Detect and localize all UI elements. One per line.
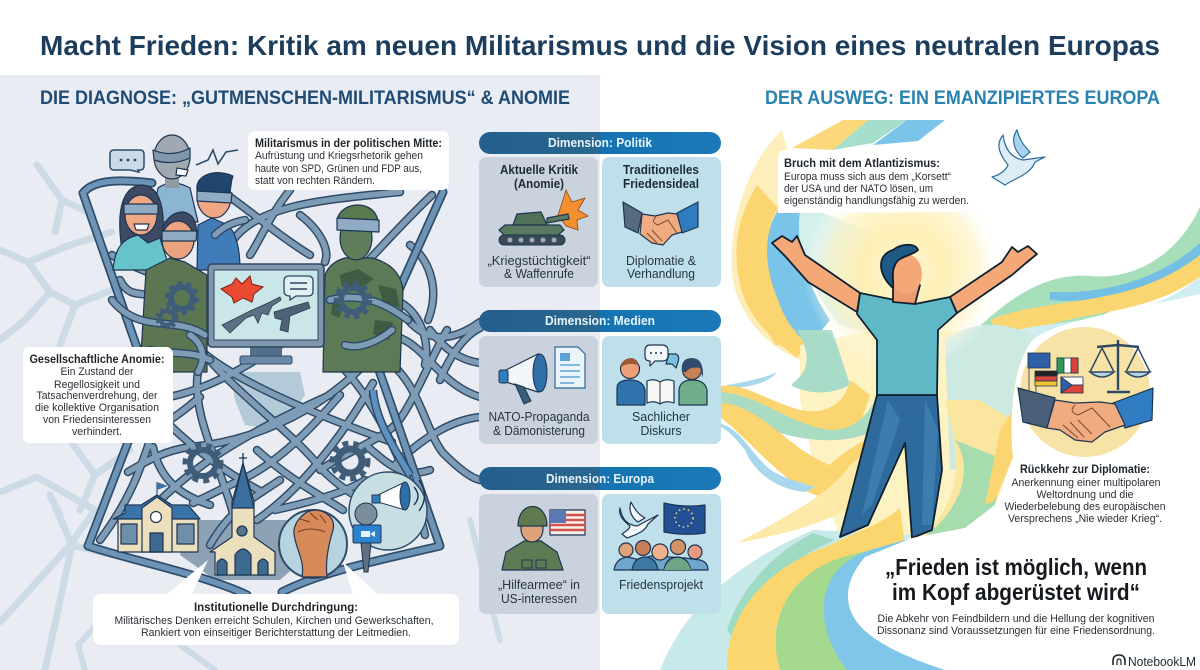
- callout: Rückkehr zur Diplomatie: Anerkennung einer multipolaren: [1012, 477, 1160, 489]
- callout: Bruch mit dem Atlantizismus: [778, 150, 978, 213]
- explosion: [221, 276, 263, 303]
- icon: flags: [1028, 353, 1083, 393]
- callout: Rückkehr zur Diplomatie: Wiederbelebung des europäischen: [1004, 501, 1166, 513]
- sun glow behind figure: [803, 170, 1003, 370]
- callout pointers: [167, 560, 377, 594]
- card: traditional ideal: Verhandlung: [627, 267, 695, 281]
- person: man in blue: [197, 173, 240, 270]
- shaded ground behind buildings: [180, 520, 320, 580]
- blindfolded crowd: [113, 135, 403, 372]
- heading: Der Ausweg: DER AUSWEG: EIN EMANZIPIERTES EUROPA: [765, 88, 1160, 109]
- right wave: [960, 207, 1200, 350]
- panel: Dimension Medien: [479, 310, 721, 444]
- monitor with weapons: [208, 264, 324, 364]
- figure with open arms: [772, 236, 1037, 538]
- callout: Militarismus in der politischen Mitte: Aufrüstung und Kriegsrhetorik gehen: [255, 150, 423, 162]
- callout: Institutionelle Durchdringung: [93, 594, 459, 645]
- neck and head: [893, 280, 920, 304]
- icon: US flag: [550, 510, 585, 535]
- flowing left bands: [721, 380, 870, 430]
- header bar: [479, 132, 721, 154]
- icon: tank firing: [499, 190, 588, 245]
- top diagonal stripes: [792, 120, 868, 150]
- panel: Dimension Politik: [479, 132, 721, 287]
- icon: handshake: [623, 202, 698, 245]
- card: traditional ideal: Traditionelles: [623, 163, 699, 177]
- left swirl: [731, 130, 800, 360]
- quote: Dissonanz sind Voraussetzungen für eine Friedensordnung.: [877, 625, 1155, 637]
- right panel flowing colour waves: [660, 120, 1200, 670]
- left arm: [772, 236, 860, 312]
- teal swirl details: [767, 330, 800, 345]
- callout: Militarismus in der politischen Mitte: haute von SPD, Grünen und FDP aus,: [255, 163, 422, 175]
- pistol: [274, 302, 310, 332]
- card: current critique: Aktuelle Kritik: [500, 163, 578, 177]
- icon: dove: [992, 130, 1045, 185]
- icon: school: [113, 482, 200, 552]
- callout: Institutionelle Durchdringung: Militärisches Denken erreicht Schulen, Kirchen und Gewerkschaften,: [114, 615, 434, 627]
- callout: Gesellschaftliche Anomie: Gesellschaftliche Anomie:: [30, 354, 164, 366]
- zigzag noise icon: [196, 150, 238, 165]
- callout: Bruch mit dem Atlantizismus: der USA und der NATO lösen, um: [784, 183, 933, 195]
- card: NATO propaganda: [479, 336, 598, 444]
- icon: megaphone and document: [499, 347, 585, 404]
- white spot: [750, 365, 792, 397]
- card: current critique: „Kriegstüchtigkeit“: [488, 254, 590, 268]
- header bar: Dimension: Medien: [545, 314, 655, 328]
- icon: fist: [279, 510, 347, 578]
- callout: Bruch mit dem Atlantizismus: Europa muss sich aus dem „Korsett“: [784, 171, 951, 183]
- callout: Militarismus in der politischen Mitte: Militarismus in der politischen Mitte:: [255, 138, 442, 150]
- white area behind diplomacy block: [848, 294, 1200, 670]
- card: current critique: (Anomie): [514, 177, 564, 191]
- header bar: [479, 310, 721, 332]
- icon: white dove: [620, 502, 658, 538]
- card: auxiliary army: [479, 494, 598, 614]
- speech bubble on monitor: [284, 276, 313, 300]
- callout: Militarismus in der politischen Mitte: statt von rechten Rändern.: [255, 175, 375, 187]
- heading: Die Diagnose: DIE DIAGNOSE: „GUTMENSCHEN-MILITARISMUS“ & ANOMIE: [40, 88, 570, 109]
- card: peace project: Friedensprojekt: [619, 578, 704, 592]
- quote: [877, 554, 1155, 637]
- title: Macht Frieden: Kritik am neuen Militarismus und die Vision eines neutralen Europas: [40, 30, 1160, 61]
- callout: Rückkehr zur Diplomatie: Rückkehr zur Diplomatie:: [1020, 464, 1150, 476]
- card: current critique: [479, 157, 598, 287]
- callout: Gesellschaftliche Anomie: [23, 347, 173, 443]
- card: current critique: & Waffenrufe: [504, 267, 574, 281]
- callout: Bruch mit dem Atlantizismus: Bruch mit dem Atlantizismus:: [784, 158, 940, 170]
- card: factual discourse: Diskurs: [640, 424, 682, 438]
- callout: Rückkehr zur Diplomatie: [1004, 464, 1166, 525]
- shirt: [857, 293, 957, 395]
- person: grey man: [152, 135, 198, 222]
- callout: Rückkehr zur Diplomatie: Weltordnung und die: [1036, 489, 1134, 501]
- rifle: [222, 297, 281, 333]
- card: traditional ideal: Diplomatie &: [626, 254, 697, 268]
- monitor reflections behind tubes: [230, 372, 305, 430]
- card: peace project: [602, 494, 721, 614]
- cage of tangled tubes: [83, 181, 480, 595]
- card: factual discourse: Sachlicher: [632, 410, 690, 424]
- callout: Gesellschaftliche Anomie: Regellosigkeit und: [54, 379, 140, 391]
- callout: Bruch mit dem Atlantizismus: eigenständig handlungsfähig zu werden.: [784, 195, 969, 207]
- tubes in front of figures: [112, 220, 410, 475]
- icon: discussion over a book: [617, 345, 707, 405]
- icon: group of people: [614, 540, 708, 570]
- speech bubble icon: [110, 150, 144, 172]
- callout: Institutionelle Durchdringung: Rankiert von einseitiger Berichterstattung der Leitmedien.: [141, 627, 411, 639]
- card: NATO propaganda: NATO-Propaganda: [488, 410, 590, 424]
- icon: soldier with US flag: [502, 506, 563, 570]
- callout: Gesellschaftliche Anomie: Ein Zustand der: [60, 366, 134, 378]
- callout: Institutionelle Durchdringung: Institutionelle Durchdringung:: [194, 602, 358, 614]
- quote: „Frieden ist möglich, wenn: [885, 554, 1147, 580]
- icon: EU flag: [664, 503, 705, 534]
- callout: Gesellschaftliche Anomie: die kollektive Organisation: [35, 402, 159, 414]
- background cracks: [0, 165, 500, 670]
- callout: Gesellschaftliche Anomie: von Friedensinteressen: [43, 414, 151, 426]
- card: auxiliary army: US-interessen: [501, 592, 577, 606]
- header bar: [479, 467, 721, 490]
- icon: handshake with suits: [1018, 388, 1153, 442]
- quote: Die Abkehr von Feindbildern und die Hellung der kognitiven: [878, 613, 1154, 625]
- gear icons: [157, 283, 370, 481]
- card: NATO propaganda: & Dämonisterung: [493, 424, 585, 438]
- panel: Dimension Europa: [479, 467, 721, 614]
- header bar: Dimension: Europa: [546, 472, 655, 486]
- card: traditional ideal: Friedensideal: [623, 177, 699, 191]
- card: auxiliary army: „Hilfearmee“ in: [498, 578, 580, 592]
- header bar: Dimension: Politik: [548, 136, 652, 150]
- lower bands: [660, 530, 945, 670]
- card: traditional ideal: [602, 157, 721, 287]
- icon: media megaphone and microphone: [349, 472, 427, 572]
- card: factual discourse: [602, 336, 721, 444]
- person: woman with long hair: [113, 185, 170, 270]
- callout: Gesellschaftliche Anomie: verhindert.: [72, 426, 122, 438]
- legs: [840, 395, 942, 538]
- diplomacy illustration: [1018, 327, 1153, 457]
- person: soldier woman: [140, 212, 207, 372]
- icon: church: [210, 453, 275, 575]
- callout: Militarismus in der politischen Mitte: [248, 131, 449, 190]
- quote: im Kopf abgerüstet wird“: [892, 579, 1140, 605]
- person: camouflaged soldier: [323, 205, 403, 372]
- callout: Gesellschaftliche Anomie: Tatsachenverdrehung, der: [36, 390, 158, 402]
- callout: Rückkehr zur Diplomatie: Versprechens „Nie wieder Krieg“.: [1008, 513, 1162, 525]
- right arm: [950, 246, 1037, 313]
- icon: scales of justice: [1090, 340, 1150, 392]
- background: left panel: [0, 75, 600, 670]
- NotebookLM mark: NotebookLM: [1128, 654, 1196, 669]
